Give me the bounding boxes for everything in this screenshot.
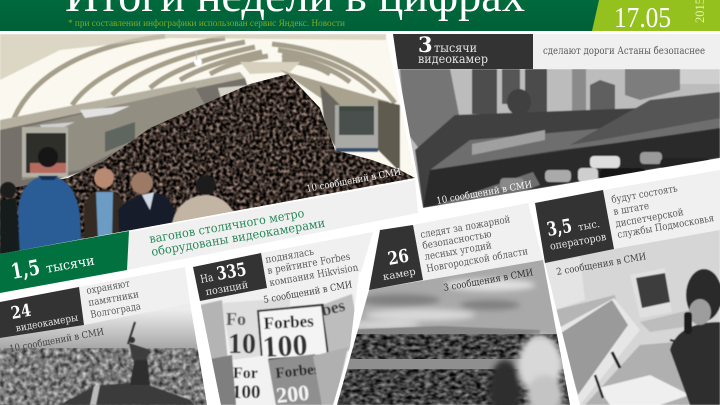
subtitle note: * при составлении инфографики использован сервис Яндекс. Новости	[68, 18, 345, 29]
photo: Astana road	[395, 69, 720, 209]
photo: Forbes magazines: Fo	[226, 309, 246, 329]
photo: Forbes magazines: Forbes	[263, 311, 315, 333]
light description box	[533, 34, 720, 69]
photo: Volgograd monument	[0, 300, 210, 405]
stat 3 тысячи видеокамер: 3	[418, 32, 433, 57]
stat 3,5 тыс. операторов: тыс.	[577, 219, 601, 234]
description text: в штате	[613, 201, 650, 218]
description text: компания Hikvision	[269, 262, 360, 289]
description text: вагонов столичного метро	[148, 206, 305, 246]
media count: 5 сообщений в СМИ	[263, 279, 353, 306]
photo: Forbes magazines: Forbes	[275, 361, 320, 382]
media count: 2 сообщения в СМИ	[556, 251, 647, 278]
crowd texture	[0, 74, 415, 254]
panel: Moscow region operators	[535, 170, 720, 405]
date badge	[592, 0, 720, 31]
stat 24 видеокамеры: видеокамеры	[15, 313, 79, 334]
dark stat box	[0, 287, 84, 338]
dark stat box	[193, 253, 267, 301]
stat 26 камер: камер	[382, 267, 417, 283]
stat 1,5 тысячи: тысячи	[45, 254, 96, 277]
media count: 10 сообщений в СМИ	[436, 179, 533, 207]
panel: Astana cameras	[393, 32, 720, 209]
stat 3,5 тыс. операторов: операторов	[549, 231, 607, 253]
panel background	[0, 267, 190, 338]
green stat box	[0, 231, 129, 293]
dark stat box	[393, 34, 533, 69]
media count: 10 сообщений в СМИ	[306, 167, 402, 195]
date: 17.05	[614, 2, 671, 34]
stat 3 тысячи видеокамер: видеокамер	[418, 52, 488, 66]
foreground passengers	[0, 147, 236, 258]
description text: диспетчерской	[615, 207, 685, 230]
panel: Forbes ranking	[193, 232, 375, 405]
stat На 335 позиций: 335	[215, 259, 248, 285]
description text: Волгограда	[90, 301, 142, 321]
photo: Forbes magazines: 100	[232, 382, 260, 403]
description text: в рейтинге Forbes	[267, 252, 351, 277]
media count: 10 сообщений в СМИ	[9, 327, 105, 355]
photo: Forbes magazines: 10	[228, 329, 256, 360]
stat На 335 позиций: позиций	[205, 280, 249, 298]
panel: metro cars	[0, 34, 420, 293]
description text: оборудованы видеокамерами	[150, 216, 326, 259]
description text: охраняют	[86, 278, 131, 297]
stat 3 тысячи видеокамер	[418, 32, 488, 66]
stat 26 камер	[378, 245, 417, 283]
description text: Новгородской области	[426, 246, 529, 275]
media count: 3 сообщения в СМИ	[443, 267, 534, 294]
description text: будут состоять	[611, 183, 679, 206]
description text: следят за пожарной	[420, 214, 511, 241]
stat 3,5 тыс. операторов: 3,5	[545, 215, 574, 241]
photo: Forbes magazines: bes	[319, 296, 347, 320]
photo: Forbes magazines: For	[233, 365, 258, 382]
panel background	[369, 203, 543, 290]
stat На 335 позиций: На	[199, 271, 215, 286]
stat 3 тысячи видеокамер: тысячи	[434, 41, 477, 55]
stat 1,5 тысячи: 1,5	[9, 254, 42, 284]
stat 24 видеокамеры	[10, 293, 79, 335]
stat 1,5 тысячи	[9, 245, 96, 284]
description text	[420, 214, 529, 275]
photo: crowded metro station	[0, 34, 420, 260]
stat На 335 позиций	[198, 259, 250, 299]
description text	[265, 247, 360, 289]
stat 24 видеокамеры: 24	[10, 301, 33, 324]
dark stat box	[369, 225, 423, 290]
panel: Novgorod forest cameras	[335, 203, 575, 405]
stat 26 камер: 26	[386, 246, 411, 270]
photo: forest	[335, 255, 575, 405]
description text: лесных угодий	[424, 240, 493, 263]
panel background	[535, 170, 720, 263]
panel: Volgograd monuments	[0, 267, 210, 405]
dark stat box	[535, 190, 614, 263]
description text	[86, 278, 142, 321]
description text: поднялась	[265, 247, 315, 266]
description text	[611, 183, 715, 241]
description text: безопасностью	[422, 229, 493, 252]
stat 3,5 тыс. операторов	[545, 209, 607, 253]
photo: Forbes magazines	[200, 272, 359, 405]
panel band: description	[127, 180, 418, 270]
panel background	[193, 232, 373, 301]
header band	[0, 0, 720, 34]
photo: Forbes magazines: 100	[262, 329, 308, 364]
description text: памятники	[88, 289, 140, 309]
photo: dispatch room	[540, 225, 720, 405]
